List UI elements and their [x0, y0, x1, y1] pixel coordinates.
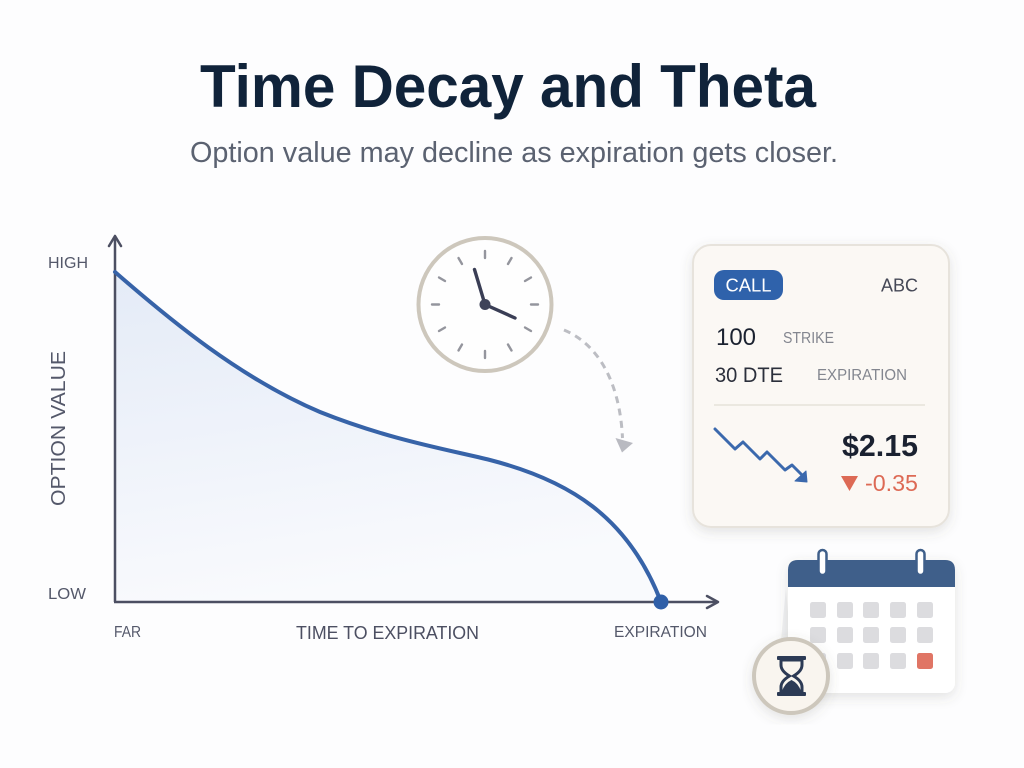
strike value: 100	[716, 324, 756, 351]
label: far: FAR	[114, 624, 141, 641]
arrow: clock to card, dashed	[564, 330, 633, 452]
ticker: ABC	[881, 274, 918, 296]
strike label: STRIKE	[783, 330, 834, 347]
area under curve	[115, 272, 661, 602]
price: $2.15	[842, 428, 918, 463]
icon: calendar	[779, 550, 955, 693]
y axis arrow	[109, 236, 121, 602]
badge: call	[714, 270, 783, 300]
price change: -0.35	[865, 470, 918, 496]
price change	[841, 470, 918, 496]
label: expiration: EXPIRATION	[614, 624, 707, 641]
expiration label: EXPIRATION	[817, 367, 907, 384]
label: time to expiration: TIME TO EXPIRATION	[296, 623, 479, 643]
calendar rings	[818, 550, 924, 575]
decay curve line	[115, 272, 661, 602]
x axis arrow	[114, 596, 718, 608]
label: high: HIGH	[48, 255, 88, 272]
badge: call: CALL	[726, 274, 772, 296]
chart: option value decay curve	[48, 236, 718, 643]
expiration point	[654, 594, 668, 610]
label: low: LOW	[48, 586, 87, 603]
days to expiration value: 30 DTE	[715, 364, 783, 387]
expiration day highlighted	[917, 653, 933, 669]
icon: clock	[418, 238, 552, 371]
label: option value: OPTION VALUE	[48, 351, 70, 506]
calendar day grid	[810, 602, 933, 669]
subtitle: Option value may decline as expiration gets closer.	[190, 137, 838, 169]
icon: hourglass badge	[754, 639, 828, 713]
panel: option card	[693, 245, 949, 527]
title: Time Decay and Theta	[200, 53, 817, 120]
falling price sparkline	[715, 429, 807, 482]
